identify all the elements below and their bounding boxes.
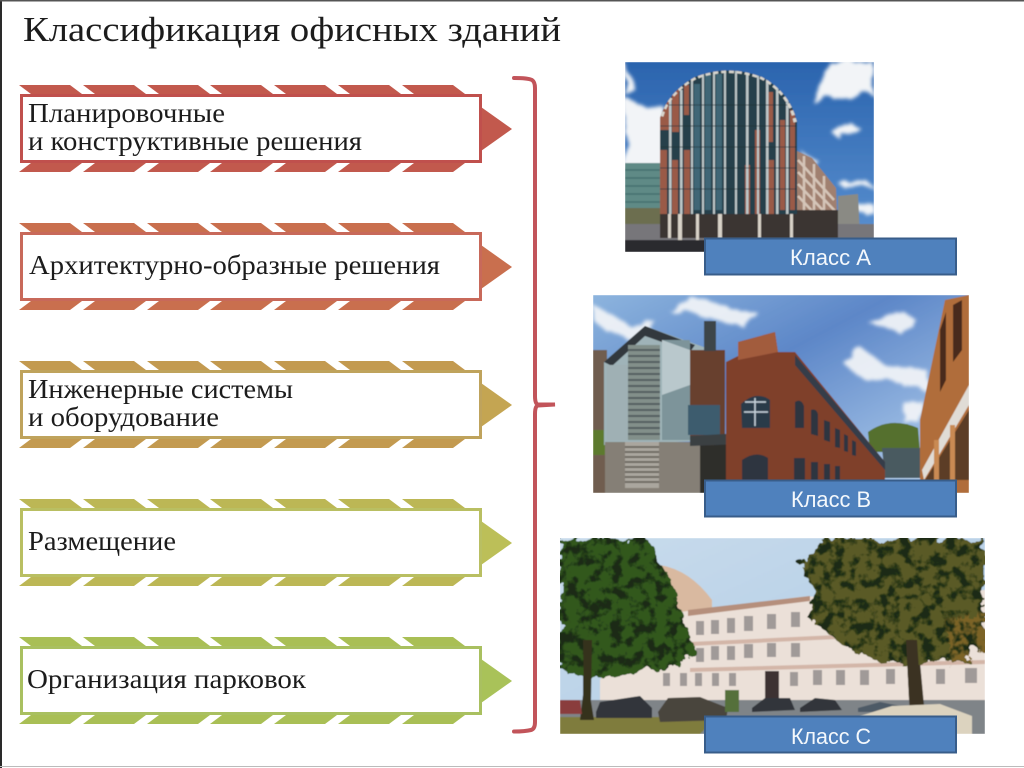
ribbon stripes	[19, 85, 465, 172]
photo: class B building	[593, 295, 969, 493]
panel: row 3 engineering systems	[19, 361, 512, 448]
photo: class A building	[625, 62, 874, 252]
label: class A: Класс А	[790, 245, 871, 270]
label: class C: Класс С	[791, 724, 871, 749]
label: Инженерные системы	[28, 374, 293, 404]
label: class A	[705, 238, 956, 274]
text box	[22, 648, 480, 714]
panel: row 5 parking	[19, 637, 512, 724]
light fins	[669, 66, 788, 214]
right bracket	[514, 78, 555, 732]
arrow head	[481, 521, 512, 565]
panel: row 1 planning and structural solutions	[19, 85, 512, 172]
label: Организация парковок	[27, 664, 307, 694]
text box	[22, 96, 480, 162]
label: и конструктивные решения	[28, 126, 362, 156]
arrow head	[481, 659, 512, 703]
panel: row 4 placement	[19, 499, 512, 586]
panel: row 2 architectural solutions	[19, 223, 512, 310]
ribbon stripes	[19, 499, 465, 586]
label: Архитектурно-образные решения	[29, 250, 440, 280]
ribbon stripes	[19, 361, 465, 448]
label: и оборудование	[28, 402, 219, 432]
red and rust panels	[660, 85, 795, 214]
text box	[22, 234, 480, 300]
arrow head	[481, 107, 512, 151]
tree foliage	[560, 538, 985, 678]
arrow head	[481, 383, 512, 427]
arrow head	[481, 245, 512, 289]
ribbon stripes	[19, 637, 465, 724]
glass panes	[694, 74, 722, 210]
title: Классификация офисных зданий	[23, 10, 561, 49]
ribbon stripes	[19, 223, 465, 310]
label: class B: Класс В	[791, 487, 871, 512]
label: class C	[705, 716, 956, 752]
label: Размещение	[28, 526, 176, 556]
text box	[22, 372, 480, 438]
label: Планировочные	[28, 98, 225, 128]
floor bands	[660, 105, 797, 189]
photo: class C building	[560, 538, 985, 734]
text box	[22, 510, 480, 576]
label: class B	[705, 480, 956, 516]
